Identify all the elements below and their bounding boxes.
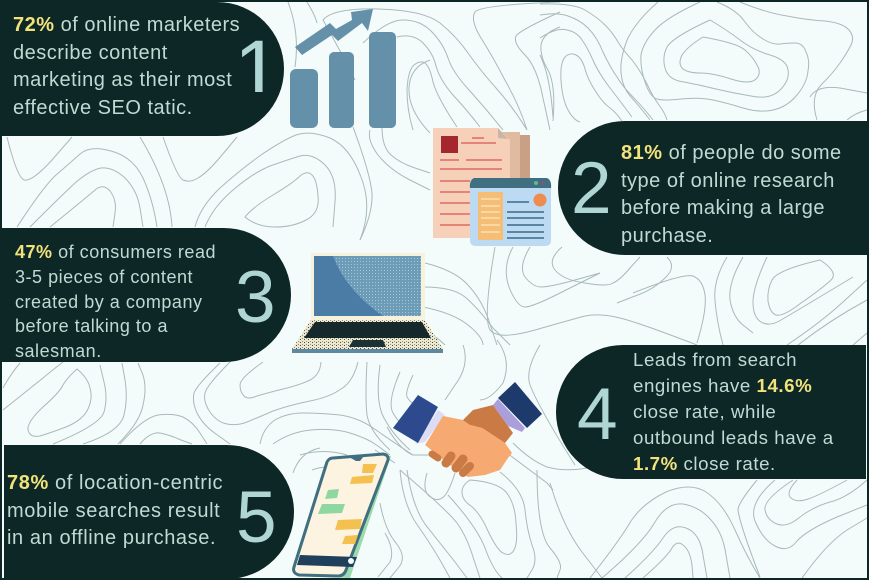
icon: laptop bbox=[292, 253, 443, 353]
icon: smartphone with chat bubbles bbox=[292, 452, 391, 578]
text: 81% statistic: purchase. bbox=[621, 224, 713, 246]
text: 72% statistic: effective SEO tatic. bbox=[13, 96, 193, 118]
number 1: 1 bbox=[234, 23, 281, 117]
text: 72% statistic bbox=[13, 14, 240, 118]
text: 47% statistic: before talking to a bbox=[15, 316, 168, 336]
text: 47% statistic: salesman. bbox=[15, 341, 102, 361]
panel 5: 78% location-centric bbox=[4, 445, 294, 579]
panel 3: 47% of consumers bbox=[0, 228, 291, 362]
panel 4: lead close rates bbox=[556, 345, 866, 479]
number 3: 3 bbox=[235, 257, 276, 338]
text: lead close rates: outbound leads have a bbox=[633, 427, 834, 448]
text: 72% statistic: marketing as their most bbox=[13, 69, 232, 91]
panel 2: 81% online research bbox=[558, 121, 869, 255]
text: 78% statistic bbox=[7, 472, 223, 549]
text: 72% statistic: describe content bbox=[13, 42, 168, 64]
icon: documents and browser window bbox=[433, 128, 552, 246]
text: lead close rates: 1.7% close rate. bbox=[633, 453, 776, 474]
icon: rising bar chart with arrow bbox=[290, 9, 396, 128]
text: 47% statistic: 3-5 pieces of content bbox=[15, 267, 193, 287]
text: 78% statistic: mobile searches result bbox=[7, 500, 220, 522]
text: 47% statistic: 47% of consumers read bbox=[15, 242, 216, 262]
text: 78% statistic: 78% of location-centric bbox=[7, 472, 223, 494]
text: 81% statistic: before making a large bbox=[621, 197, 825, 219]
text: lead close rates: Leads from search bbox=[633, 349, 797, 370]
text: 81% statistic: type of online research bbox=[621, 170, 835, 192]
text: 81% statistic bbox=[621, 142, 842, 246]
text: lead close rates: engines have 14.6% bbox=[633, 375, 812, 396]
text: lead close rates bbox=[633, 349, 834, 474]
text: 78% statistic: in an offline purchase. bbox=[7, 527, 216, 549]
number 2: 2 bbox=[571, 148, 612, 229]
number 4: 4 bbox=[577, 374, 618, 455]
icon: handshake bbox=[393, 382, 542, 477]
text: lead close rates: close rate, while bbox=[633, 401, 776, 422]
panel 1: 72% content marketing bbox=[0, 2, 284, 136]
text: 47% statistic bbox=[15, 242, 216, 361]
number 5: 5 bbox=[236, 477, 277, 558]
text: 72% statistic: 72% of online marketers bbox=[13, 14, 240, 36]
text: 81% statistic: 81% of people do some bbox=[621, 142, 842, 164]
text: 47% statistic: created by a company bbox=[15, 292, 202, 312]
